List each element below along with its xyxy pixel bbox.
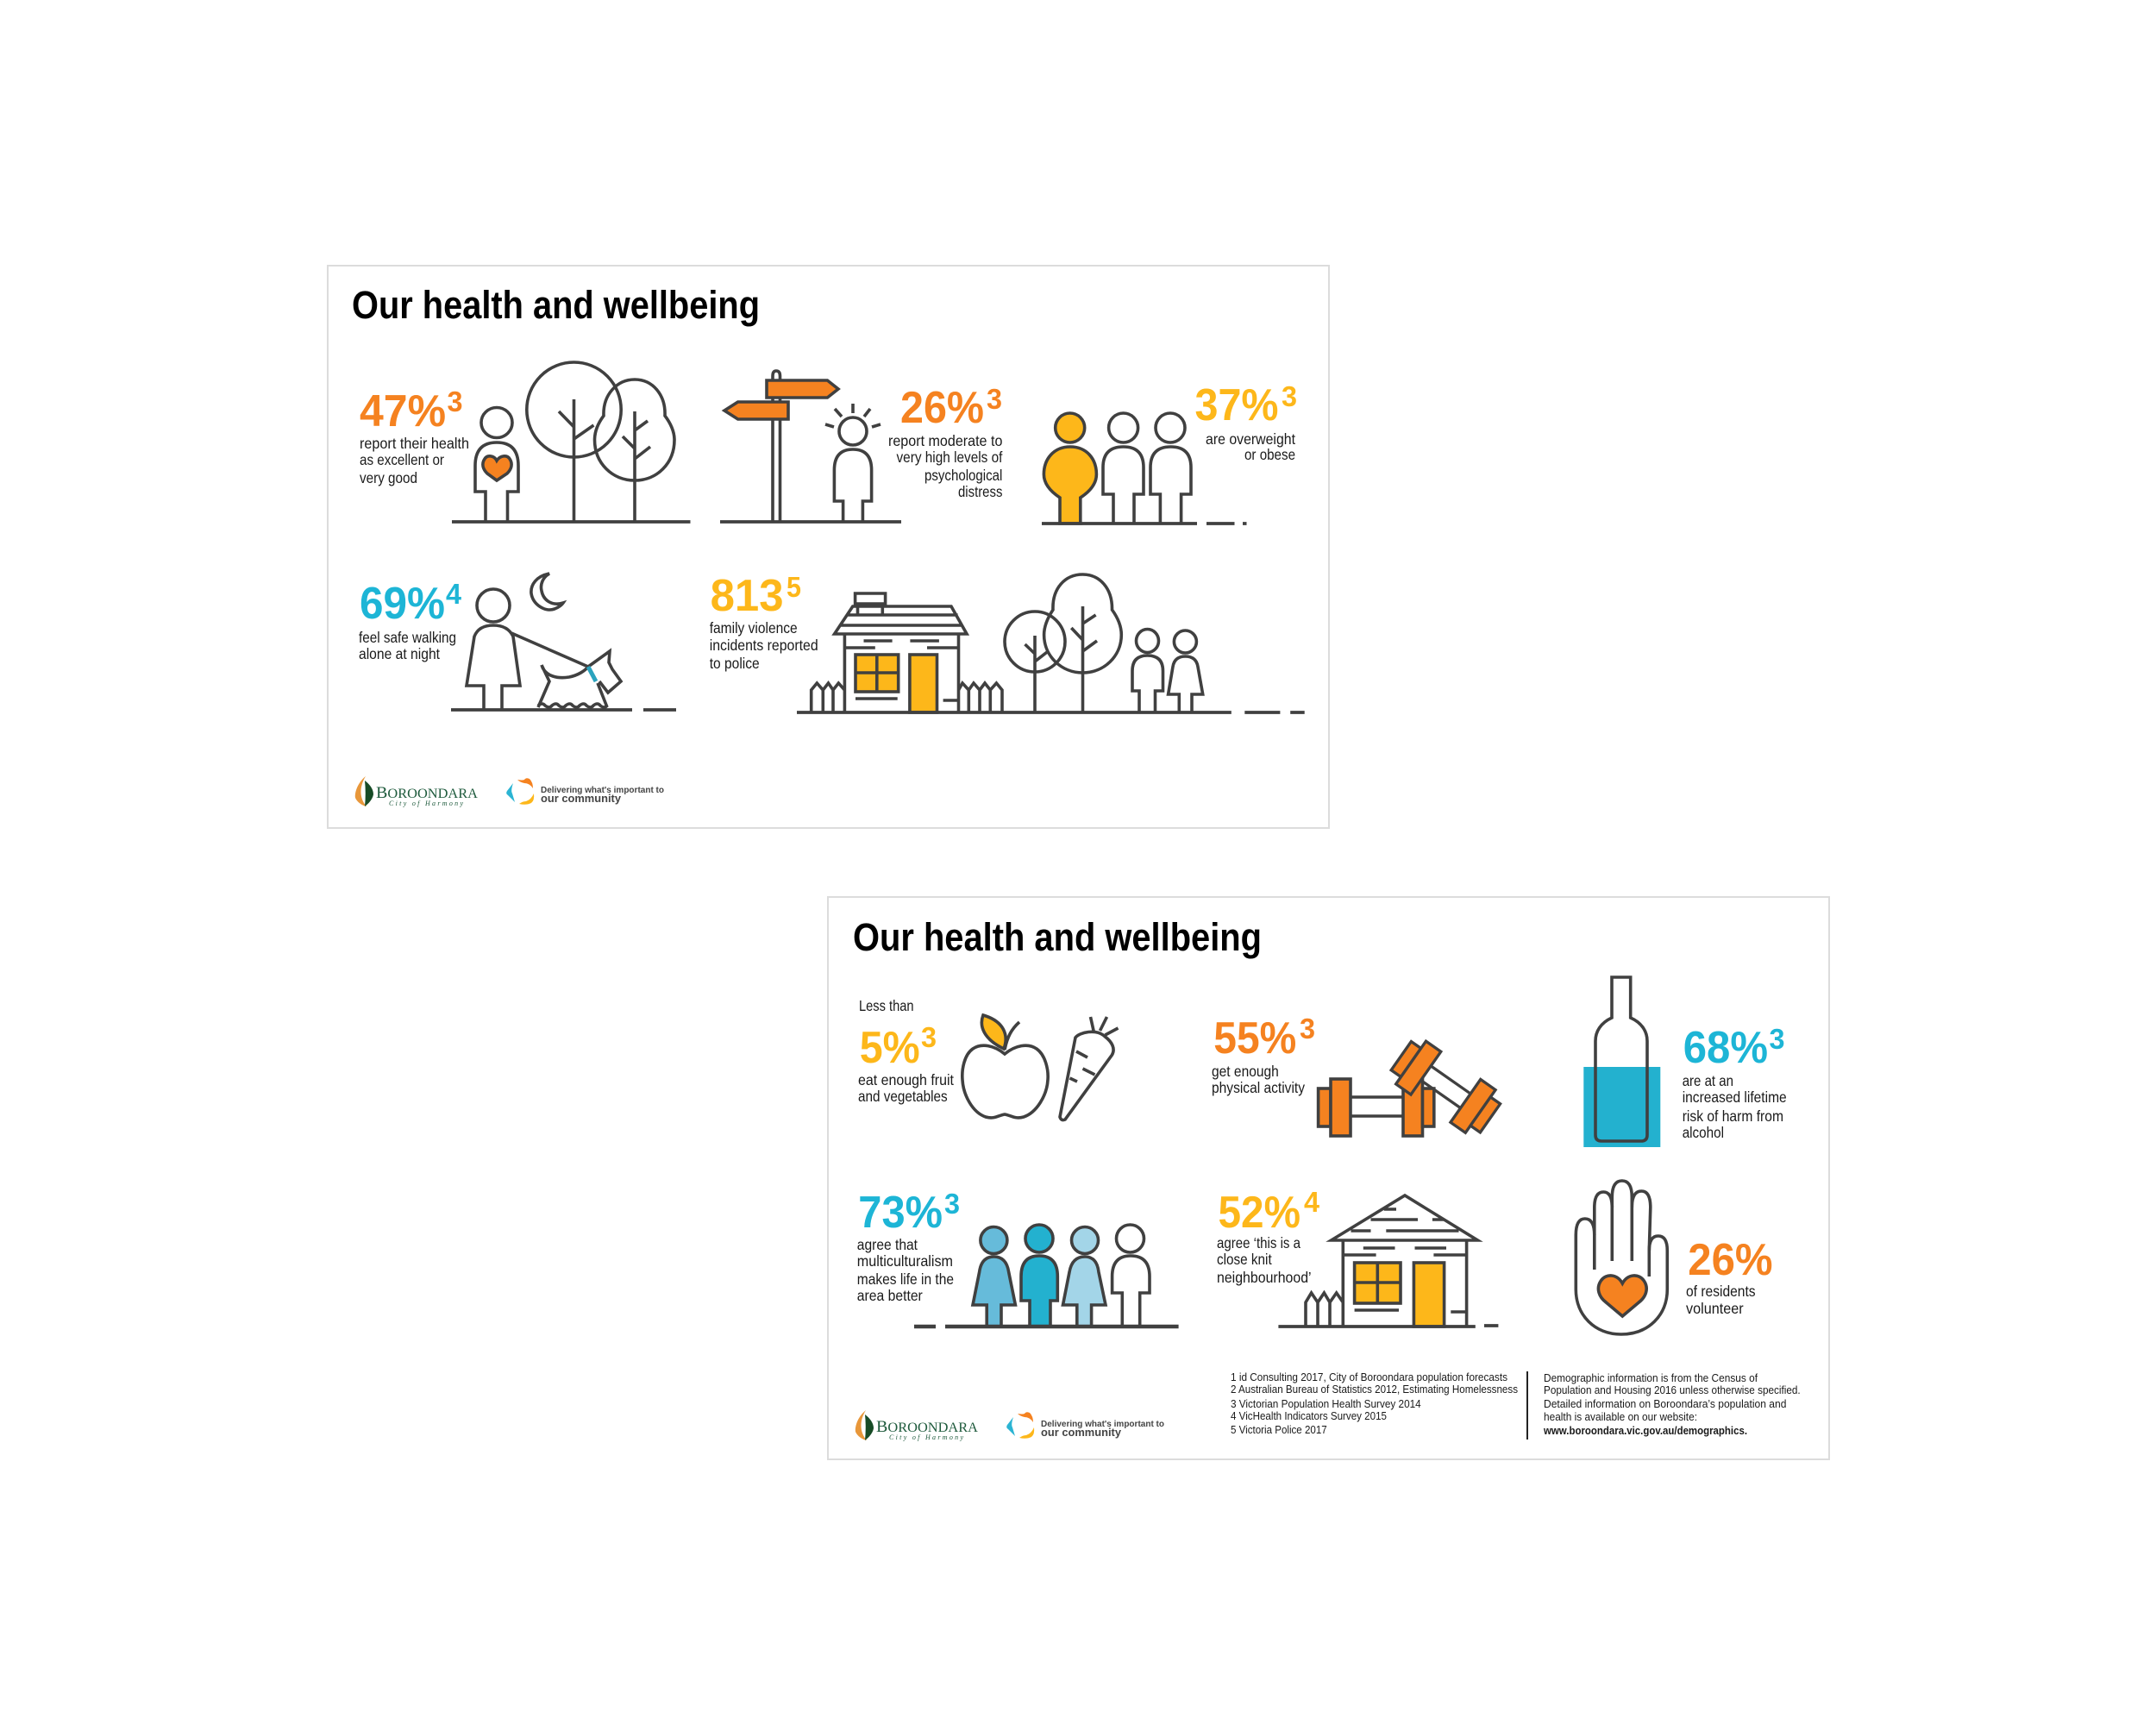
- stat: 52% close knit neighbourhood: [1217, 1186, 1320, 1286]
- stat: 37% overweight or obese: [1195, 380, 1297, 463]
- icon: house with fence: [1278, 1195, 1498, 1327]
- icon: two dumbbells: [1319, 1034, 1505, 1139]
- title: Our health and wellbeing: [853, 915, 1262, 959]
- stat: 47% report good health: report their health: [360, 435, 469, 452]
- stat: 52% close knit neighbourhood: close knit: [1217, 1251, 1272, 1268]
- footnotes: sources: [1231, 1371, 1518, 1436]
- stat: 26% psychological distress: psychological: [924, 467, 1002, 484]
- stat: 55% physical activity: get enough: [1212, 1063, 1279, 1080]
- stat: 47% report good health: 47%: [360, 386, 446, 436]
- stat: 47% report good health: 3: [447, 386, 462, 417]
- logo: Boroondara, City of Harmony: [355, 776, 479, 807]
- stat: 813 family violence incidents: to police: [710, 655, 760, 672]
- note: demographic information and website: health is available on our website:: [1544, 1411, 1697, 1423]
- stat: 813 family violence incidents: incidents reported: [710, 637, 818, 654]
- panel: health and wellbeing part two: [828, 897, 1829, 1459]
- stat: 73% multiculturalism: 73%: [858, 1188, 943, 1238]
- stat: 69% feel safe: 4: [446, 578, 462, 610]
- logo: Boroondara, City of Harmony: City of Harmony: [389, 800, 463, 807]
- stat: 73% multiculturalism: agree that: [857, 1236, 918, 1253]
- stat: 813 family violence incidents: 5: [787, 571, 801, 603]
- footnotes: sources: 4 VicHealth Indicators Survey 2015: [1231, 1410, 1387, 1422]
- stat: less than 5% eat enough fruit and vegetables: Less than: [859, 997, 914, 1014]
- stat: 26% psychological distress: report moderate to: [888, 432, 1002, 449]
- logo: Boroondara, City of Harmony: [856, 1410, 979, 1441]
- stat: 52% close knit neighbourhood: agree ‘this is a: [1217, 1234, 1300, 1251]
- stat: 47% report good health: [360, 386, 469, 486]
- note: demographic information and website: Detailed information on Boroondara’s population and: [1544, 1398, 1786, 1410]
- icon: apple and carrot: [962, 1015, 1118, 1120]
- stat: 69% feel safe: [359, 578, 462, 662]
- stat: 26% psychological distress: very high levels of: [897, 448, 1003, 466]
- logo: Delivering what's important to our community: [1006, 1412, 1164, 1439]
- stat: 68% risk of harm from alcohol: alcohol: [1683, 1124, 1724, 1141]
- note: demographic information and website: Demographic information is from the Census of: [1544, 1372, 1758, 1384]
- logo: Delivering what's important to our community: our community: [541, 792, 622, 805]
- stat: 73% multiculturalism: makes life in the: [857, 1270, 954, 1288]
- stat: 73% multiculturalism: [857, 1188, 960, 1304]
- stat: 37% overweight or obese: or obese: [1244, 446, 1295, 463]
- stat: 52% close knit neighbourhood: 52%: [1218, 1188, 1300, 1238]
- stat: 55% physical activity: 55%: [1213, 1013, 1296, 1063]
- icon: four people in shades of blue: [914, 1225, 1179, 1327]
- logo: Delivering what's important to our community: Delivering what's important to: [1041, 1420, 1164, 1429]
- logo: Delivering what's important to our community: our community: [1041, 1426, 1122, 1439]
- stat: 47% report good health: very good: [360, 469, 417, 486]
- stat: 68% risk of harm from alcohol: risk of harm from: [1683, 1107, 1783, 1125]
- icon: three people, one yellow: [1042, 413, 1247, 524]
- stat: 68% risk of harm from alcohol: 68%: [1683, 1023, 1768, 1073]
- panel: health and wellbeing part one: [328, 266, 1329, 828]
- stat: less than 5% eat enough fruit and vegetables: 3: [921, 1021, 937, 1053]
- stat: 26% psychological distress: [888, 383, 1003, 500]
- icon: bottle with blue liquid block: [1583, 977, 1660, 1147]
- stat: 813 family violence incidents: 813: [711, 571, 784, 621]
- stat: 55% physical activity: [1212, 1013, 1315, 1096]
- note: demographic information and website: [1543, 1372, 1801, 1437]
- icon: person walking dog under moon: [451, 574, 676, 710]
- stat: 68% risk of harm from alcohol: increased lifetime: [1683, 1088, 1787, 1106]
- stat: 37% overweight or obese: 3: [1282, 380, 1297, 412]
- icon: person with heart and trees: [452, 362, 690, 522]
- footnotes: sources: 5 Victoria Police 2017: [1231, 1424, 1327, 1436]
- stat: 69% feel safe: feel safe walking: [359, 629, 456, 646]
- footnotes: sources: 2 Australian Bureau of Statistics 2012, Estimating Homelessness: [1231, 1383, 1518, 1396]
- stat: less than 5% eat enough fruit and vegetables: [858, 997, 954, 1105]
- stat: 26% psychological distress: 26%: [900, 383, 984, 433]
- logo: Boroondara, City of Harmony: BOROONDARA: [876, 1418, 979, 1436]
- stat: 37% overweight or obese: are overweight: [1206, 430, 1295, 448]
- stat: 73% multiculturalism: 3: [944, 1188, 960, 1220]
- title: Our health and wellbeing: [352, 283, 760, 327]
- stat: 55% physical activity: physical activity: [1212, 1079, 1305, 1096]
- stat: 26% volunteer: of residents: [1686, 1283, 1756, 1300]
- stat: 73% multiculturalism: area better: [857, 1287, 923, 1304]
- stat: 52% close knit neighbourhood: neighbourhood’: [1217, 1269, 1312, 1286]
- stat: less than 5% eat enough fruit and vegetables: 5%: [860, 1023, 920, 1073]
- stat: 69% feel safe: alone at night: [359, 645, 440, 662]
- footnotes: sources: 3 Victorian Population Health Survey 2014: [1231, 1398, 1421, 1410]
- stat: 813 family violence incidents: [710, 571, 818, 672]
- stat: 813 family violence incidents: family violence: [710, 619, 798, 637]
- stat: 68% risk of harm from alcohol: are at an: [1683, 1072, 1733, 1089]
- stat: 55% physical activity: 3: [1300, 1013, 1315, 1044]
- note: demographic information and website: Population and Housing 2016 unless otherwise specified.: [1544, 1384, 1801, 1396]
- footnotes: sources: 1 id Consulting 2017, City of Boroondara population forecasts: [1231, 1371, 1507, 1383]
- stat: 26% psychological distress: distress: [958, 483, 1003, 500]
- stat: 68% risk of harm from alcohol: [1683, 1023, 1787, 1141]
- stat: less than 5% eat enough fruit and vegetables: eat enough fruit: [858, 1071, 954, 1088]
- logo: Boroondara, City of Harmony: BOROONDARA: [376, 784, 479, 802]
- stat: 47% report good health: as excellent or: [360, 451, 444, 468]
- stat: 52% close knit neighbourhood: 4: [1304, 1186, 1320, 1218]
- stat: 68% risk of harm from alcohol: 3: [1770, 1023, 1785, 1055]
- logo: Boroondara, City of Harmony: City of Harmony: [889, 1433, 963, 1441]
- icon: signpost and distressed person: [720, 371, 901, 522]
- icon: house with fence, trees and two people: [797, 574, 1305, 712]
- note: demographic information and website: www.boroondara.vic.gov.au/demographics.: [1543, 1425, 1747, 1437]
- stat: 26% volunteer: volunteer: [1686, 1300, 1744, 1317]
- logo: Delivering what's important to our community: [506, 778, 664, 805]
- icon: hand with heart: [1576, 1181, 1667, 1334]
- stat: 69% feel safe: 69%: [360, 579, 445, 629]
- stat: 37% overweight or obese: 37%: [1195, 380, 1278, 430]
- logo: Delivering what's important to our community: Delivering what's important to: [541, 786, 664, 795]
- stat: 26% psychological distress: 3: [987, 383, 1002, 415]
- stat: 26% volunteer: 26%: [1688, 1235, 1773, 1285]
- stat: 26% volunteer: [1686, 1235, 1773, 1317]
- stat: less than 5% eat enough fruit and vegetables: and vegetables: [858, 1088, 948, 1105]
- stat: 73% multiculturalism: multiculturalism: [857, 1252, 953, 1270]
